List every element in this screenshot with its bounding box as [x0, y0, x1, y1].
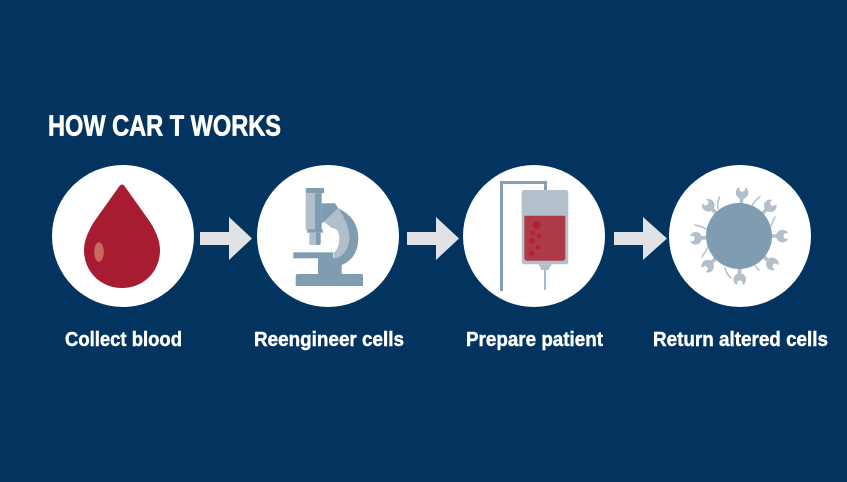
label: collect blood: Collect blood — [65, 329, 182, 351]
iv pole — [502, 182, 546, 291]
cell body — [706, 203, 772, 269]
panel: reengineer cells — [254, 165, 404, 351]
arrow 2 — [407, 217, 459, 260]
label: return altered cells: Return altered cells — [653, 329, 828, 351]
icon: car t cell — [688, 185, 790, 287]
icon: microscope — [293, 188, 363, 286]
circle: collect blood — [52, 165, 194, 307]
arrow 3 — [614, 217, 667, 260]
bubbles — [529, 221, 541, 256]
panel: prepare patient — [463, 165, 605, 351]
label: prepare patient: Prepare patient — [466, 329, 603, 351]
thin spikes — [695, 196, 775, 278]
panel: collect blood — [52, 165, 194, 351]
circle: return altered cells — [669, 165, 811, 307]
icon: iv bag — [502, 182, 568, 291]
circle: prepare patient — [463, 165, 605, 307]
panel: return altered cells — [653, 165, 828, 351]
circle: reengineer cells — [257, 165, 399, 307]
blood in bag — [524, 216, 565, 261]
arrow 1 — [200, 217, 252, 260]
icon: blood drop — [84, 184, 160, 288]
wrench receptors — [688, 185, 790, 287]
bag — [522, 190, 568, 264]
title: HOW CAR T WORKS — [48, 110, 281, 142]
nozzle and tube — [538, 264, 552, 270]
label: reengineer cells: Reengineer cells — [254, 329, 404, 351]
